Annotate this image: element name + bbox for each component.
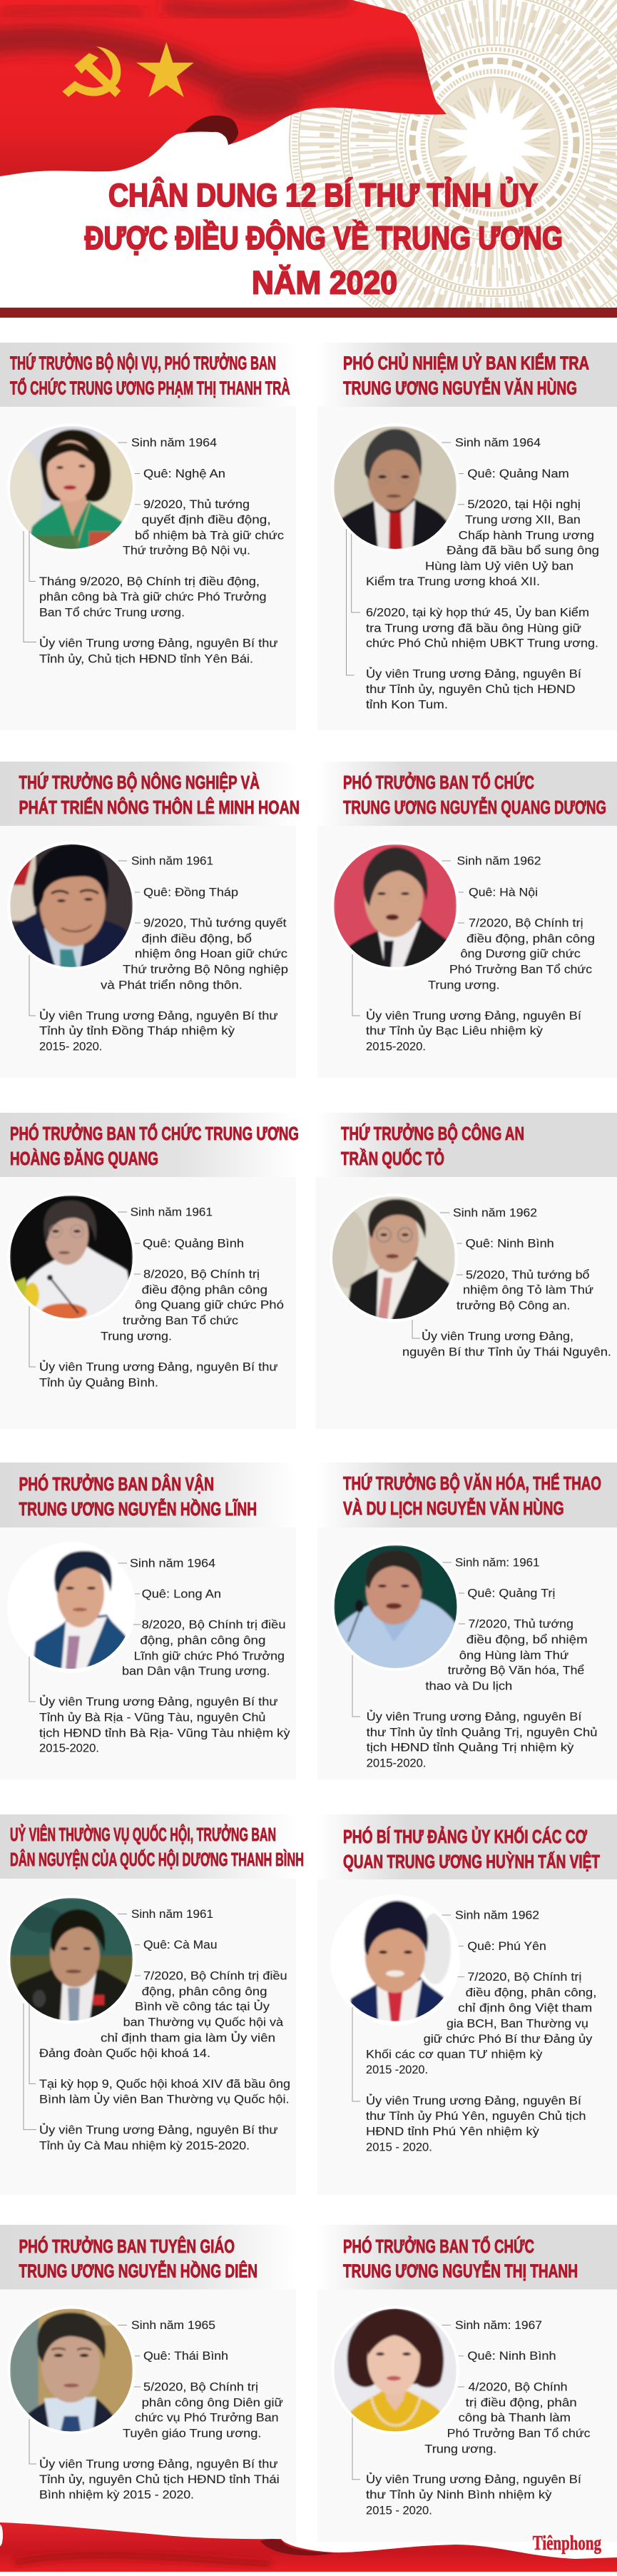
bio text [366,854,595,1054]
bio text: ông Quang giữ chức Phó [135,1298,284,1312]
panel: Trần Quốc Tỏ [332,1113,617,1358]
bio text: Ủy viên Trung ương Đảng, nguyên Bí [366,2094,581,2107]
bio text: Đảng đã bầu bổ sung ông [447,544,599,557]
bio text: Ủy viên Trung ương Đảng, nguyên Bí thư [39,1694,278,1709]
icon: gold star [136,42,194,97]
bio text: Ủy viên Trung ương Đảng, nguyên Bí [366,1009,581,1022]
heading [343,1826,600,1872]
heading: PHÓ TRƯỞNG BAN TỔ CHỨC TRUNG ƯƠNG [10,1123,299,1144]
bio text: Ủy viên Trung ương Đảng, [422,1329,573,1343]
bio text: và Phát triển nông thôn. [101,978,243,992]
connector lines [352,861,464,1016]
heading [19,1473,257,1520]
portrait [33,1550,126,1669]
bio text: ông Hùng làm Thứ [459,1649,568,1662]
bio text: điều động, bổ nhiệm [466,1633,588,1646]
bio text: chỉ định tham gia làm Ủy viên [101,2031,275,2044]
bio text: Tỉnh ủy Bà Rịa - Vũng Tàu, nguyên Chủ [39,1710,265,1724]
portrait [10,2308,133,2431]
bio text: Quê: Thái Bình [143,2349,228,2363]
bio text: tịch HĐND tỉnh Quảng Trị nhiệm kỳ [367,1740,574,1754]
bio text [39,854,288,1054]
title: CHÂN DUNG 12 BÍ THƯ TỈNH ỦY [108,177,538,213]
bio text: Tháng 9/2020, Bộ Chính trị điều động, [39,575,260,588]
heading: PHÓ TRƯỞNG BAN TUYÊN GIÁO [19,2236,235,2257]
heading: DÂN NGUYỆN CỦA QUỐC HỘI DƯƠNG THANH BÌNH [10,1849,304,1870]
bio text: Sinh năm 1964 [130,1556,215,1570]
bio text: Tỉnh ủy, nguyên Chủ tịch HĐND tỉnh Thái [39,2473,280,2486]
bio text: 7/2020, Bộ Chính trị [467,1970,581,1984]
title [85,177,563,301]
heading [10,353,290,398]
dark red divider bar [0,308,617,318]
bio text: 2015 - 2020. [366,2140,432,2154]
bio text: Quê: Hà Nội [469,885,538,899]
connector lines [29,861,141,1016]
bio text: quyết định điều động, [142,512,271,527]
heading: TRẦN QUỐC TỎ [341,1148,444,1169]
heading: THỨ TRƯỞNG BỘ NÔNG NGHIỆP VÀ [19,772,260,793]
bio text: Tỉnh ủy Quảng Bình. [39,1376,158,1389]
bio text: Quê: Ninh Bình [467,2349,556,2363]
bio text [402,1206,611,1359]
portrait [7,1895,136,2024]
heading [19,2236,257,2282]
bio text: Quê: Đồng Tháp [143,885,238,899]
bio text: Sinh năm 1962 [457,854,541,868]
bio text: tịch HĐND tỉnh Bà Rịa- Vũng Tàu nhiệm kỳ [39,1726,290,1740]
bio text: phân công ông Diên giữ [142,2395,283,2410]
fold shadow [185,116,238,145]
heading [10,1123,299,1169]
bio text: Bình làm Ủy viên Ban Thường vụ Quốc hội. [39,2093,290,2106]
bio text: Hùng làm Uỷ viên Uỷ ban [425,560,573,572]
bio text: 2015-2020. [366,1039,426,1054]
bio text: Thứ trưởng Bộ Nông nghiệp [123,962,288,976]
panel: Lê Minh Hoan [0,762,300,1078]
bio text: bổ nhiệm bà Trà giữ chức [135,528,285,542]
panel: Phạm Thị Thanh Trà [0,343,290,665]
bio text: tỉnh Kon Tum. [366,698,448,711]
bio text [366,1909,596,2154]
bio text: điều động phân công [142,1283,267,1296]
bio text: thư Tỉnh ủy Ninh Bình nhiệm kỳ [366,2488,552,2501]
bio text: Quê: Phú Yên [467,1939,546,1953]
bronze drum emblem [289,0,617,308]
footer: red wave ribbon [0,2522,617,2572]
bio text: nhiệm ông Tỏ làm Thứ [463,1283,593,1296]
panel: Hoàng Đăng Quang [0,1113,298,1389]
portrait [328,1193,458,1322]
heading: PHÓ TRƯỞNG BAN DÂN VẬN [19,1473,214,1495]
bio text: Tại kỳ họp 9, Quốc hội khoá XIV đã bầu ông [39,2077,290,2091]
bio text: 9/2020, Thủ tướng quyết [143,916,287,929]
bio text: công bà Thanh làm [459,2411,571,2424]
bio text: trưởng Bộ Văn hóa, Thể [448,1663,584,1677]
bio text: Quê: Quảng Trị [467,1586,555,1600]
heading [343,2236,578,2282]
heading [341,1123,524,1169]
bio text: điều động, phân công [466,932,595,945]
bio text: 7/2020, Bộ Chính trị [469,916,583,929]
bio text: phân công bà Trà giữ chức Phó Trưởng [39,590,267,604]
bio text: Sinh năm: 1967 [455,2318,542,2332]
bio text: 2015-2020. [367,1756,427,1770]
bio text: thư Tỉnh ủy tỉnh Quảng Trị, nguyên Chủ [367,1726,598,1739]
bio text: Chấp hành Trung ương [459,528,594,542]
heading: UỶ VIÊN THƯỜNG VỤ QUỐC HỘI, TRƯỞNG BAN [10,1824,276,1845]
bio text: trị điều động, phân [466,2395,577,2410]
bio text: ban Dân vận Trung ương. [122,1665,270,1677]
bio text: động, phân công ông [142,1984,267,1999]
bio text: Sinh năm 1961 [131,854,213,868]
bio text: 4/2020, Bộ Chính [468,2380,568,2394]
bio text: 2015 -2020. [366,2063,428,2076]
bio text [39,1907,290,2153]
bio text: 8/2020, Bộ Chính trị điều [142,1617,285,1632]
bio text: Sinh năm 1961 [131,1907,213,1921]
banner: bronze drum, flag and title [0,0,617,348]
bio text: giữ chức Phó Bí thư Đảng ủy [424,2032,593,2046]
bio text: Khối các cơ quan TƯ nhiệm kỳ [366,2047,543,2061]
heading: PHÓ TRƯỞNG BAN TỔ CHỨC [343,2236,534,2257]
panel: Nguyễn Hồng Diên [0,2225,282,2501]
panel: Nguyễn Văn Hùng (VHTTDL) [317,1463,617,1779]
bio text: Sinh năm 1965 [131,2318,215,2332]
connector lines [29,1212,141,1367]
bio text: 8/2020, Bộ Chính trị [143,1268,260,1281]
bio text: Trung ương. [428,978,500,992]
bio text: Quê: Quảng Nam [467,467,569,480]
panel: Huỳnh Tấn Việt [338,1814,617,2151]
bio text: định điều động, bổ [142,932,252,945]
bio text: 2015- 2020. [39,1039,102,1054]
heading: PHÓ TRƯỞNG BAN TỔ CHỨC [343,772,534,793]
bio text: HĐND tỉnh Phú Yên nhiệm kỳ [366,2124,539,2138]
portrait [7,842,136,970]
bio text: Sinh năm 1961 [131,1205,213,1219]
bio text: thư Tỉnh ủy, nguyên Chủ tịch HĐND [366,682,576,696]
panel: Nguyễn Văn Hùng (UBKT) [334,343,617,708]
bio text: gia BCH, Ban Thường vụ [447,2017,588,2030]
portrait [331,842,459,970]
bio text: Phó Trưởng Ban Tổ chức [449,962,593,976]
connector lines [29,1563,141,1702]
heading [343,1473,601,1519]
heading: THỨ TRƯỞNG BỘ NỘI VỤ, PHÓ TRƯỞNG BAN [10,353,276,374]
bio text: Bình về công tác tại Ủy [135,2000,270,2013]
bio text [39,436,285,665]
bio text: 5/2020, tại Hội nghị [467,497,581,511]
bio text: 7/2020, Bộ Chính trị điều [143,1969,287,1983]
bio text: Quê: Long An [142,1587,221,1600]
heading [343,353,589,398]
panel: Nguyễn Thị Thanh [334,2225,617,2514]
bio text: Kiểm tra Trung ương khoá XII. [366,575,540,588]
bio text: Thứ trưởng Bộ Nội vụ. [123,544,250,557]
bio text: Phó Trưởng Ban Tổ chức [447,2427,591,2440]
heading: THỨ TRƯỞNG BỘ CÔNG AN [341,1123,524,1144]
bio text: chức Phó Chủ nhiệm UBKT Trung ương. [366,637,598,650]
bio text: Ủy viên Trung ương Đảng, nguyên Bí thư [39,1009,278,1022]
bio text: Ủy viên Trung ương Đảng, nguyên Bí [366,667,581,681]
title: NĂM 2020 [252,265,397,301]
bio text: Quê: Quảng Bình [143,1236,244,1251]
connector lines [352,1915,464,2101]
bio text: Sinh năm 1962 [455,1909,539,1921]
connector lines [29,2325,141,2464]
bio text: 2015 - 2020. [366,2504,432,2517]
bio text: Ban Tổ chức Trung ương. [39,605,185,620]
bio text: Bình nhiệm kỳ 2015 - 2020. [39,2488,194,2501]
bio text: nguyên Bí thư Tỉnh ủy Thái Nguyên. [402,1345,611,1359]
portrait [350,1900,451,2021]
heading [343,772,606,818]
bio text: 2015-2020. [39,1742,99,1754]
connector lines [24,443,141,642]
bio text [39,1556,290,1754]
heading: TRUNG ƯƠNG NGUYỄN HỒNG DIÊN [19,2261,257,2282]
heading: TỔ CHỨC TRUNG ƯƠNG PHẠM THỊ THANH TRÀ [10,377,290,398]
portrait [7,1193,136,1321]
bio text: Lĩnh giữ chức Phó Trưởng [134,1649,285,1663]
bio text: Sinh năm: 1961 [455,1556,539,1569]
bio text: động, phân công ông [140,1633,265,1647]
icon: hammer and sickle [62,46,121,97]
bio text: chức vụ Phó Trưởng Ban [135,2411,279,2424]
bio text: Trung ương XII, Ban [465,512,581,527]
bio text: điều động, phân công, [466,1986,596,1999]
bio text: thao và Du lịch [425,1679,512,1693]
connector lines [412,1213,463,1338]
heading: PHÁT TRIỂN NÔNG THÔN LÊ MINH HOAN [19,797,300,818]
bio text [367,1556,598,1770]
bio text: Ủy viên Trung ương Đảng, nguyên Bí [366,2473,581,2486]
bio text: 5/2020, Bộ Chính trị [143,2380,258,2394]
connector lines [352,2325,464,2480]
bio text: ban Thường vụ Quốc hội và [123,2016,284,2029]
bio text: Trung ương. [424,2443,496,2455]
bio text: Ủy viên Trung ương Đảng, nguyên Bí thư [39,2457,278,2471]
bio text: Sinh năm 1962 [453,1206,537,1219]
bio text: trưởng Bộ Công an. [457,1299,570,1312]
bio text: Ủy viên Trung ương Đảng, nguyên Bí [367,1710,582,1723]
bio text: Quê: Ninh Bình [466,1236,554,1251]
red party flag [0,0,457,178]
bio text: Trung ương. [101,1329,172,1343]
portrait [331,2305,459,2434]
bio text [39,1205,284,1389]
bio text: nhiệm ông Hoan giữ chức [135,946,288,961]
heading [10,1824,304,1870]
bio text: 5/2020, Thủ tướng bổ [466,1268,589,1282]
bio text: Ủy viên Trung ương Đảng, nguyên Bí thư [39,2123,278,2137]
bio text: Tỉnh ủy, Chủ tịch HĐND tỉnh Yên Bái. [39,652,253,665]
heading [19,772,300,818]
bio text: Ủy viên Trung ương Đảng, nguyên Bí thư [39,637,278,650]
heading: TRUNG ƯƠNG NGUYỄN HỒNG LĨNH [19,1498,257,1520]
panel: Nguyễn Quang Dương [334,762,617,1051]
bio text: 7/2020, Thủ tướng [468,1617,573,1630]
bio text: 9/2020, Thủ tướng [143,497,250,511]
bio text: Sinh năm 1964 [455,436,541,450]
panel: Dương Thanh Bình [0,1814,304,2152]
portrait [7,423,136,552]
bio text: Quê: Cà Mau [143,1938,217,1951]
bio text: tra Trung ương đã bầu ông Hùng giữ [366,621,581,635]
bio text: chỉ định ông Việt tham [458,2001,592,2014]
bio text [366,436,599,711]
bio text: thư Tỉnh ủy Bạc Liêu nhiệm kỳ [366,1024,544,1038]
bio text: 6/2020, tại kỳ họp thứ 45, Ủy ban Kiểm [366,605,589,620]
bio text: Ủy viên Trung ương Đảng, nguyên Bí thư [39,1360,278,1373]
bio text: Tỉnh ủy tỉnh Đồng Tháp nhiệm kỳ [39,1024,235,1038]
bio text: Sinh năm 1964 [131,436,217,450]
bio text: ông Dương giữ chức [461,946,581,961]
portrait [331,423,459,552]
bio text: Tuyên giáo Trung ương. [123,2427,261,2440]
connector lines [352,1562,465,1717]
panel: Nguyễn Hồng Lĩnh [0,1463,290,1752]
portrait [331,1542,459,1671]
bio text [366,2318,591,2517]
heading: HOÀNG ĐĂNG QUANG [10,1148,158,1169]
connector lines [347,443,464,675]
bio text: Quê: Nghệ An [143,467,225,480]
bio text: Đảng đoàn Quốc hội khoá 14. [39,2046,210,2060]
bio text: thư Tỉnh ủy Phú Yên, nguyên Chủ tịch [366,2109,586,2123]
bio text [39,2318,283,2501]
connector lines [24,1914,141,2130]
bio text: Tỉnh ủy Cà Mau nhiệm kỳ 2015-2020. [39,2138,250,2153]
bio text: trưởng Ban Tổ chức [123,1313,239,1328]
